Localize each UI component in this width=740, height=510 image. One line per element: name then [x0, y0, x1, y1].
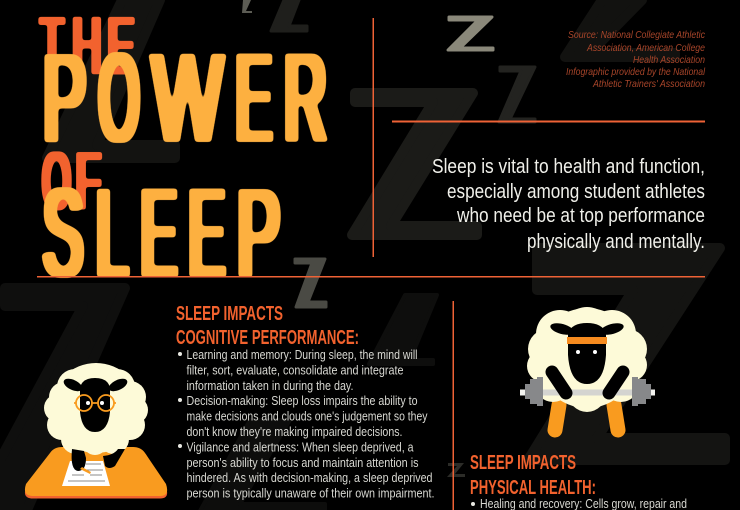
title [40, 2, 326, 303]
source credits: Athletic Trainers' Association [592, 78, 705, 90]
section: cognitive performance: information taken in during the day. [186, 378, 354, 393]
text: R [284, 29, 326, 168]
illustration: studying sheep at desk [25, 363, 167, 498]
section: cognitive performance: person is typically unaware of their own impairment. [186, 486, 434, 501]
title: H [72, 2, 101, 92]
source credits: Health Association [633, 54, 705, 66]
section: cognitive performance: filter, sort, evaluate, consolidate and integrate [186, 362, 404, 377]
title: O [99, 29, 139, 168]
section: physical health [470, 452, 687, 510]
intro text: Sleep is vital to health and function, [432, 156, 705, 178]
section: cognitive performance: make decisions and clouds one's judgement so they [186, 409, 428, 424]
section: cognitive performance: hindered. As with decision-making, a sleep deprived [186, 470, 432, 485]
section: cognitive performance: Decision-making: Sleep loss impairs the ability to [186, 393, 418, 408]
title: F [76, 136, 101, 226]
title: P [237, 164, 280, 303]
section: physical health: PHYSICAL HEALTH: [470, 477, 596, 499]
intro text: physically and mentally. [527, 231, 705, 253]
intro text: especially among student athletes [447, 181, 705, 203]
intro text [432, 156, 705, 253]
section: cognitive performance: don't know they're making impaired decisions. [186, 424, 402, 439]
illustration: weightlifting sheep [520, 307, 655, 430]
title: E [236, 29, 272, 168]
title: T [40, 2, 64, 92]
section: cognitive performance [176, 303, 434, 501]
source credits: Source: National Collegiate Athletic [568, 29, 706, 41]
title: E [189, 164, 225, 303]
source credits: Infographic provided by the National [566, 66, 706, 78]
title: L [96, 164, 128, 303]
title: E [108, 2, 134, 92]
title: W [152, 29, 223, 168]
section: cognitive performance: SLEEP IMPACTS [176, 303, 283, 325]
section: cognitive performance: Learning and memory: During sleep, the mind will [186, 347, 418, 362]
section: physical health: SLEEP IMPACTS [470, 452, 576, 474]
title: S [43, 164, 83, 303]
title: P [43, 29, 86, 168]
source credits [566, 29, 706, 90]
section: cognitive performance: Vigilance and alertness: When sleep deprived, a [186, 439, 414, 454]
source credits: Association, American College [586, 42, 705, 54]
title: O [43, 136, 70, 226]
intro text: who need be at top performance [456, 205, 705, 227]
section: cognitive performance: person's ability to focus and maintain attention is [186, 455, 419, 470]
section: cognitive performance: COGNITIVE PERFORMANCE: [176, 327, 359, 349]
title: E [141, 164, 177, 303]
